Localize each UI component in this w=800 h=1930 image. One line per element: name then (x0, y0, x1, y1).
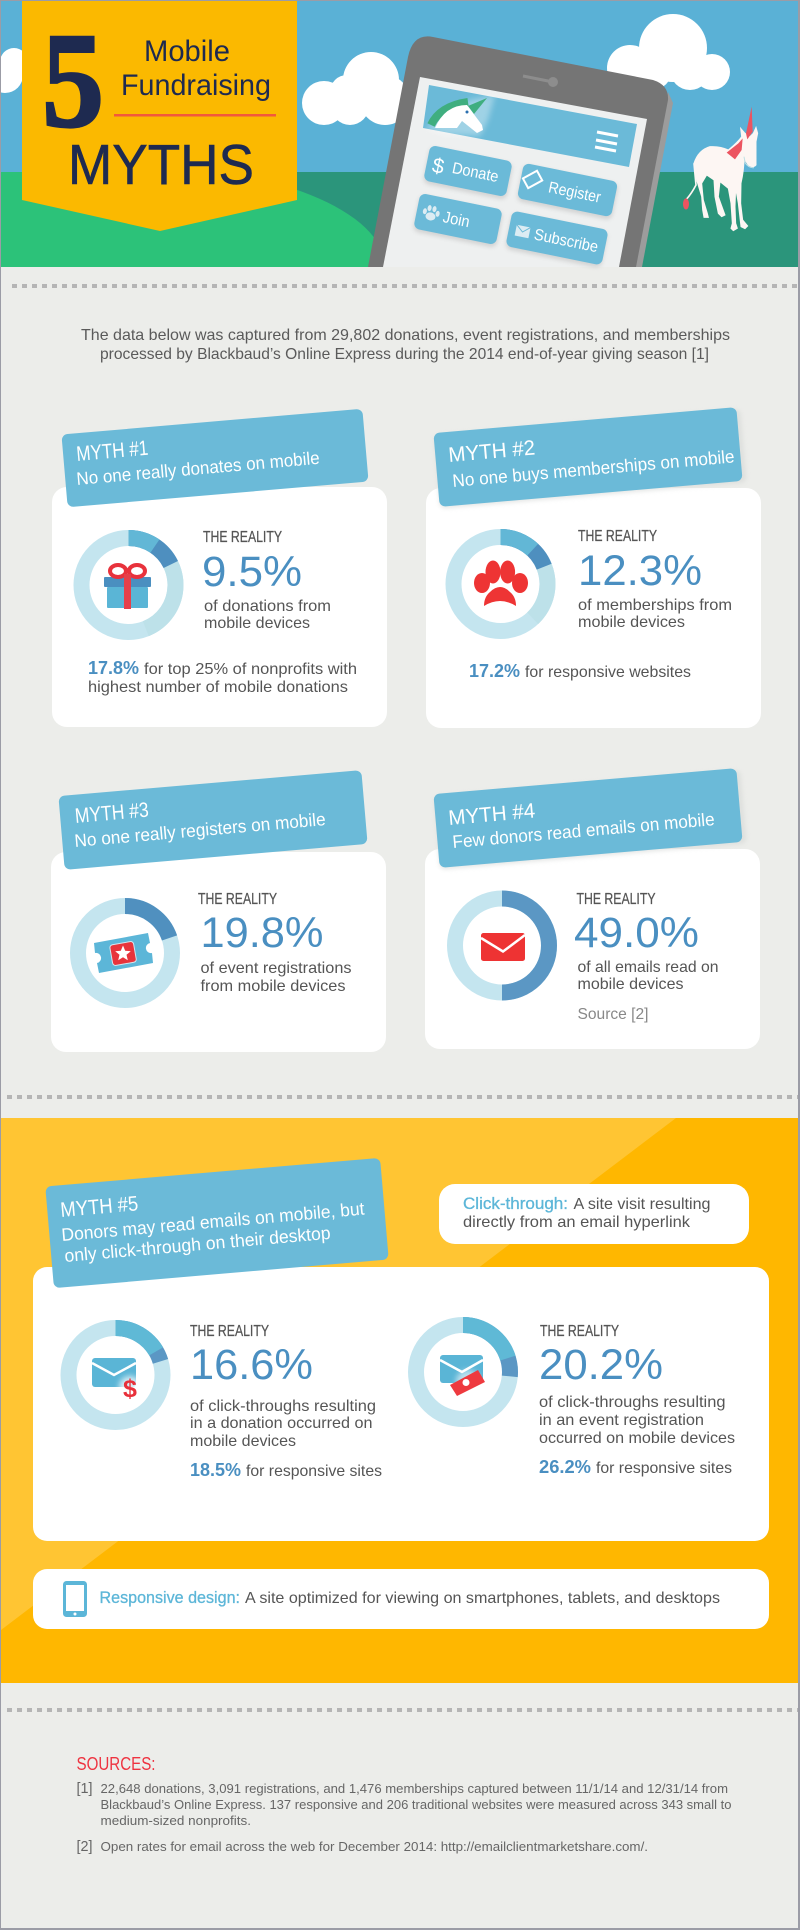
myth 5 banner (45, 1158, 389, 1288)
reality text: mobile devices (578, 976, 684, 993)
panel: myth 2 (426, 407, 761, 728)
myth 2 banner (433, 407, 747, 509)
stat note: 17.2% (469, 661, 520, 681)
cloud right (607, 14, 730, 91)
click-through callout: Click-through: (463, 1194, 568, 1213)
myth 3 banner: MYTH #3 (74, 799, 150, 828)
sources: [2] (76, 1838, 92, 1855)
donut chart 20.2% (416, 1325, 510, 1419)
panel: myth 5 (1, 1118, 798, 1683)
reality text: mobile devices (190, 1433, 296, 1450)
reality text (578, 528, 732, 631)
button donate (423, 145, 514, 200)
sources: 22,648 donations, 3,091 registrations, and 1,476 memberships captured between 11/1/14 and 12/31/14 from (100, 1781, 728, 1796)
myth 5 banner: MYTH #5 (59, 1192, 139, 1222)
reality text: 12.3% (578, 547, 702, 595)
title text: Mobile (144, 35, 230, 68)
title text: MYTHS (68, 133, 254, 197)
reality text: 49.0% (574, 909, 699, 957)
reality text: 16.6% (190, 1341, 313, 1389)
donut chart 9.5% (82, 538, 176, 632)
reality text: 26.2% (539, 1457, 591, 1477)
logo unicorn (425, 95, 495, 136)
cloud center (302, 52, 410, 125)
button join (413, 193, 504, 248)
icon: envelope with dollar: $ (123, 1375, 137, 1403)
myth 1 banner (61, 409, 369, 507)
donut chart 49.0% (455, 898, 549, 992)
button join: Join (441, 209, 471, 231)
responsive design callout: Responsive design: (100, 1588, 240, 1607)
reality text (539, 1323, 735, 1477)
myth 4 banner (433, 768, 747, 870)
myth 1 banner: No one really donates on mobile (76, 448, 320, 489)
icon: ticket (94, 933, 153, 973)
reality text: in an event registration (539, 1412, 704, 1429)
reality text: Source [2] (578, 1006, 648, 1023)
button subscribe: Subscribe (532, 227, 600, 256)
reality text: THE REALITY (578, 528, 657, 545)
intro text: The data below was captured from 29,802 donations, event registrations, and memberships (81, 327, 730, 344)
donut chart 16.6% (68, 1328, 162, 1422)
icon: smartphone (63, 1581, 87, 1617)
icon: paw (474, 560, 528, 606)
hamburger menu (595, 132, 618, 151)
reality text: 18.5% (190, 1460, 241, 1480)
title badge (22, 1, 297, 231)
reality text: 9.5% (202, 548, 302, 596)
sources: Open rates for email across the web for December 2014: http://emailclientmarketshare.com/. (100, 1839, 648, 1854)
myth 5 banner: Donors may read emails on mobile, but (61, 1199, 365, 1245)
sources (76, 1754, 732, 1855)
stat note: for top 25% of nonprofits with (144, 661, 357, 678)
reality text: mobile devices (204, 615, 310, 632)
myth 4 banner: Few donors read emails on mobile (452, 809, 715, 852)
phone (368, 36, 673, 268)
responsive design callout (33, 1569, 769, 1629)
stat note (469, 661, 691, 681)
button register (516, 163, 619, 220)
click-through callout: directly from an email hyperlink (463, 1214, 691, 1231)
myth 1 banner: MYTH #1 (75, 437, 149, 466)
reality text: 19.8% (200, 909, 324, 957)
myth 3 banner (58, 770, 368, 870)
click-through callout (439, 1184, 749, 1244)
title text (68, 35, 276, 197)
reality text: THE REALITY (203, 529, 282, 546)
reality text: of click-throughs resulting (190, 1398, 376, 1415)
icon: gift (104, 565, 151, 609)
donut chart 19.8% (78, 906, 172, 1000)
stat note (88, 658, 357, 696)
header illustration (0, 0, 800, 268)
donut chart 12.3% (454, 537, 548, 631)
stat note: for responsive websites (525, 664, 691, 681)
reality text: THE REALITY (198, 891, 277, 908)
panel: myth 4 (425, 768, 760, 1049)
reality text: of all emails read on (578, 959, 718, 976)
reality text: for responsive sites (596, 1460, 732, 1477)
button donate: Donate (451, 160, 500, 186)
button register: Register (547, 179, 603, 207)
reality text: of donations from (204, 598, 331, 615)
reality text (574, 891, 718, 1023)
button subscribe (505, 211, 609, 268)
numeral 5: 5 (42, 6, 104, 156)
myth 2 banner: MYTH #2 (447, 436, 536, 467)
stat note: highest number of mobile donations (88, 679, 348, 696)
reality text: occurred on mobile devices (539, 1430, 735, 1447)
reality text (202, 529, 331, 632)
cloud left (0, 48, 28, 93)
icon: envelope with dollar (92, 1358, 141, 1403)
responsive design callout: A site optimized for viewing on smartphones, tablets, and desktops (245, 1590, 720, 1607)
reality text: for responsive sites (246, 1463, 382, 1480)
reality text: mobile devices (578, 614, 685, 631)
hill (0, 165, 385, 267)
sources: Blackbaud’s Online Express. 137 responsive and 206 traditional websites were measured across 343 small to (100, 1797, 732, 1812)
myth 3 banner: No one really registers on mobile (74, 809, 326, 851)
myth 2 banner: No one buys memberships on mobile (452, 446, 735, 491)
reality text: of memberships from (578, 597, 732, 614)
stat note: 17.8% (88, 658, 139, 678)
intro text: processed by Blackbaud’s Online Express during the 2014 end-of-year giving season [1] (100, 346, 709, 363)
reality text: THE REALITY (576, 891, 656, 908)
panel: myth 3 (51, 770, 386, 1052)
sources: SOURCES: (76, 1754, 156, 1774)
reality text: THE REALITY (190, 1323, 269, 1340)
intro text (81, 327, 730, 363)
reality text: 20.2% (539, 1341, 663, 1389)
panel: myth 1 (52, 409, 387, 727)
reality text: of click-throughs resulting (539, 1394, 726, 1411)
sources: medium-sized nonprofits. (100, 1813, 251, 1828)
reality text: from mobile devices (200, 978, 346, 995)
icon: envelope (481, 933, 525, 961)
reality text (198, 891, 352, 995)
reality text: THE REALITY (540, 1323, 619, 1340)
click-through callout: A site visit resulting (574, 1196, 710, 1213)
button donate: $ (430, 154, 446, 179)
unicorn (683, 107, 758, 231)
myth 5 banner: only click-through on their desktop (64, 1223, 331, 1266)
reality text: of event registrations (200, 960, 352, 977)
icon: envelope with ticket (440, 1355, 485, 1396)
reality text: in a donation occurred on (190, 1415, 372, 1432)
title text: Fundraising (121, 69, 271, 102)
myth 4 banner: MYTH #4 (447, 799, 536, 830)
reality text (190, 1323, 382, 1480)
sources: [1] (76, 1780, 92, 1797)
